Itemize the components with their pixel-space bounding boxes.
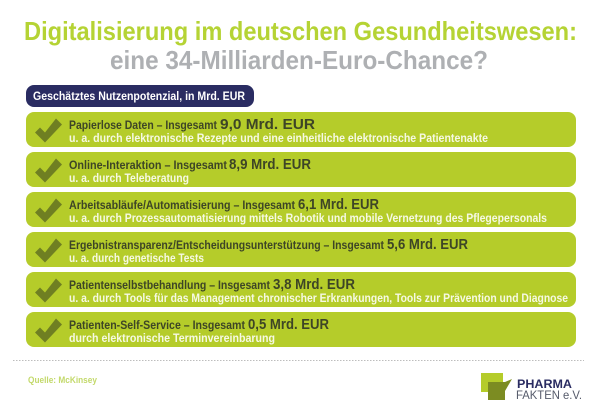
source note: Quelle: McKinsey bbox=[28, 375, 97, 385]
panel: Online-Interaktion: 8,9 Mrd. EUR bbox=[229, 157, 311, 173]
panel: Online-Interaktion: Online-Interaktion – Insgesamt bbox=[69, 160, 227, 172]
panel: Patienten-Self-Service: durch elektronische Terminvereinbarung bbox=[69, 333, 275, 345]
logo: Pharma Fakten: PHARMA bbox=[517, 379, 572, 391]
panel: Patientenselbstbehandlung: 3,8 Mrd. EUR bbox=[273, 277, 355, 293]
panel: Patientenselbstbehandlung bbox=[26, 272, 576, 307]
heading pill: Geschätztes Nutzenpotenzial bbox=[26, 85, 254, 107]
panel: Patientenselbstbehandlung: Patientenselbstbehandlung – Insgesamt bbox=[69, 280, 270, 292]
logo: Pharma Fakten: FAKTEN e.V. bbox=[516, 390, 582, 402]
panel: Papierlose Daten bbox=[26, 112, 576, 147]
panel: Ergebnistransparenz/Entscheidungsunterstützung: Ergebnistransparenz/Entscheidungsunterstützung – Insgesamt bbox=[69, 240, 384, 252]
panel: Papierlose Daten: 9,0 Mrd. EUR bbox=[220, 117, 316, 133]
panel: Ergebnistransparenz/Entscheidungsunterstützung bbox=[26, 232, 576, 267]
panel: Papierlose Daten: u. a. durch elektronische Rezepte und eine einheitliche elektronische Patientenakte bbox=[69, 133, 488, 145]
heading pill: Geschätztes Nutzenpotenzial: Geschätztes Nutzenpotenzial, in Mrd. EUR bbox=[33, 91, 246, 103]
panel: Ergebnistransparenz/Entscheidungsunterstützung: 5,6 Mrd. EUR bbox=[387, 237, 468, 253]
logo: Pharma Fakten bbox=[481, 373, 582, 402]
panel: Online-Interaktion: u. a. durch Teleberatung bbox=[69, 173, 189, 185]
title: eine 34-Milliarden-Euro-Chance? bbox=[110, 45, 488, 75]
panel: Online-Interaktion bbox=[26, 152, 576, 187]
panel: Arbeitsabläufe/Automatisierung: Arbeitsabläufe/Automatisierung – Insgesamt bbox=[69, 200, 295, 212]
panel: Patienten-Self-Service: 0,5 Mrd. EUR bbox=[248, 317, 329, 333]
panel: Arbeitsabläufe/Automatisierung: 6,1 Mrd. EUR bbox=[298, 197, 379, 213]
panel: Patienten-Self-Service: Patienten-Self-Service – Insgesamt bbox=[69, 320, 245, 332]
panel: Ergebnistransparenz/Entscheidungsunterstützung: u. a. durch genetische Tests bbox=[69, 253, 204, 265]
panel: Arbeitsabläufe/Automatisierung bbox=[26, 192, 576, 227]
panel: Patienten-Self-Service bbox=[26, 312, 576, 347]
title bbox=[24, 16, 577, 75]
panel: Arbeitsabläufe/Automatisierung: u. a. durch Prozessautomatisierung mittels Robotik und mobile Vernetzung des Pflegepersonals bbox=[69, 213, 547, 225]
panel: Papierlose Daten: Papierlose Daten – Insgesamt bbox=[69, 120, 217, 132]
